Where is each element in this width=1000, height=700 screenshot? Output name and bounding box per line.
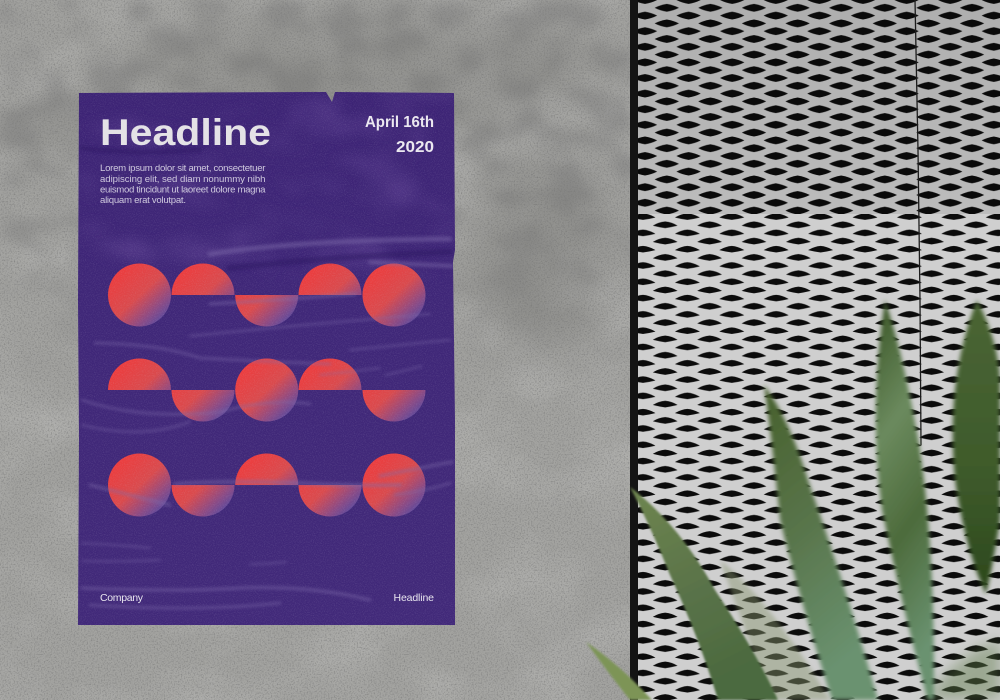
footer right: headline: Headline	[394, 592, 434, 604]
leaf D	[953, 300, 1000, 594]
title: Headline	[100, 112, 271, 153]
top half circle	[298, 358, 362, 390]
footer left: company: Company	[100, 592, 144, 604]
full circle	[235, 358, 298, 422]
faded background leaf right	[925, 640, 1000, 700]
body text: Lorem ipsum dolor sit amet, consectetuer	[100, 163, 266, 174]
small leaf bottom left	[586, 642, 652, 700]
poster sheet	[78, 92, 455, 625]
date: 2020	[396, 139, 434, 156]
leaf C	[876, 300, 934, 700]
full circle	[108, 454, 171, 516]
body text	[100, 163, 266, 206]
metal mesh panel	[636, 0, 1000, 700]
body text: aliquam erat volutpat.	[100, 195, 186, 206]
poster wrinkles	[82, 148, 452, 608]
body text: euismod tincidunt ut laoreet dolore magna	[100, 184, 266, 196]
date: April 16th	[365, 114, 434, 131]
leaf B	[764, 385, 878, 700]
bottom half circle	[298, 485, 362, 516]
foliage shadow on wall	[0, 0, 630, 365]
top half circle	[235, 454, 298, 485]
poster blotches	[107, 101, 416, 266]
full circle	[362, 264, 426, 326]
circle row 1	[108, 264, 426, 326]
leaf A	[630, 487, 778, 700]
full circle	[362, 454, 426, 516]
faded background leaf	[720, 560, 830, 700]
vertical mesh seam	[915, 0, 921, 445]
top half circle	[298, 264, 362, 295]
plant leaves	[586, 300, 1000, 700]
body text: adipiscing elit, sed diam nonummy nibh	[100, 174, 266, 185]
bottom half circle	[235, 295, 298, 326]
circle row 2	[108, 358, 426, 422]
circle row 3	[108, 454, 426, 516]
top half circle	[172, 264, 234, 295]
bottom half circle	[362, 390, 426, 422]
top half circle	[108, 358, 171, 390]
poster	[78, 92, 456, 626]
date	[365, 114, 434, 156]
poster grain	[78, 92, 456, 626]
bottom half circle	[172, 485, 234, 516]
full circle	[108, 264, 171, 326]
bottom half circle	[172, 390, 234, 422]
black frame edge of mesh	[630, 0, 638, 700]
